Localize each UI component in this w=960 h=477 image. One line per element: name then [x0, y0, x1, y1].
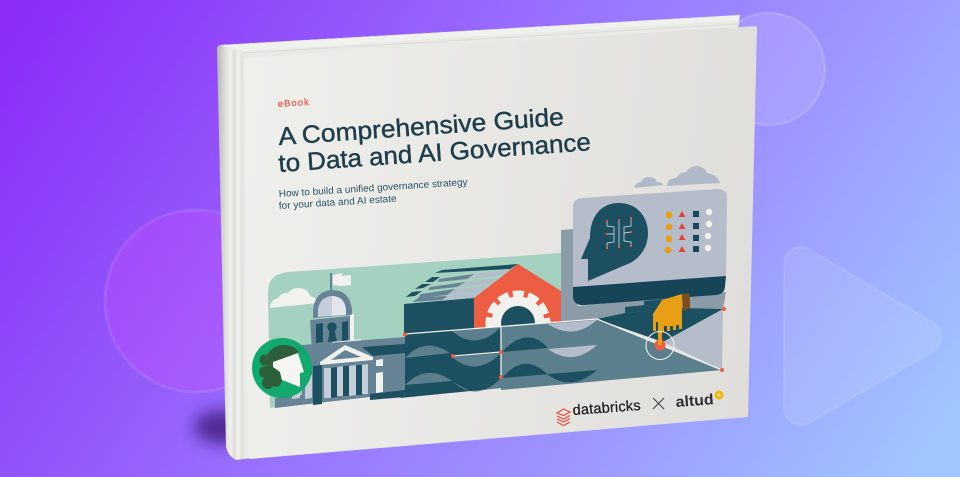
book — [217, 15, 757, 460]
subtitle: for your data and AI estate — [278, 194, 398, 212]
subtitle — [278, 177, 468, 212]
decorative play triangle — [784, 247, 941, 425]
icon: databricks stack — [557, 409, 570, 426]
decorative circle: top right — [713, 13, 825, 125]
dark warehouse box — [404, 298, 474, 336]
monitor — [573, 189, 727, 313]
flag — [330, 273, 332, 291]
main body — [275, 337, 405, 408]
icon: head with circuit — [581, 203, 648, 281]
data floor planes — [400, 308, 723, 398]
warehouse roof — [406, 264, 518, 302]
front cover — [244, 26, 757, 459]
logo mark: yellow o — [716, 392, 722, 398]
icon: pointing hand — [646, 293, 690, 360]
connector lines and nodes — [403, 307, 726, 379]
clouds: top right — [634, 166, 720, 188]
book spine — [217, 45, 252, 460]
logo text: altudo: altud — [675, 391, 714, 411]
orange gable with gear — [474, 264, 561, 352]
logos — [557, 391, 722, 426]
subtitle: How to build a unified governance strategy — [278, 177, 468, 200]
cloud: left — [270, 288, 318, 308]
capitol building — [275, 273, 405, 408]
icon: green profile badge — [252, 338, 312, 398]
dome — [313, 290, 352, 318]
dot matrix legend — [665, 209, 712, 253]
icon: gear — [489, 294, 547, 352]
monitor stand backdrop — [561, 229, 726, 322]
book shadow — [194, 410, 254, 444]
windows — [316, 321, 348, 343]
side windows — [376, 359, 383, 393]
decorative circle: left — [105, 210, 287, 392]
mint sky panel — [268, 253, 561, 408]
multiplication sign — [653, 398, 664, 409]
wave shapes — [405, 327, 501, 392]
illustration — [252, 166, 727, 408]
drum — [310, 316, 354, 352]
back cover top edge — [220, 15, 740, 62]
title: A Comprehensive Guide — [277, 103, 565, 151]
logo text: databricks: databricks — [572, 398, 641, 419]
title: to Data and AI Governance — [277, 128, 592, 178]
eyebrow: eBook: eBook — [277, 97, 309, 110]
columns — [313, 365, 322, 405]
title — [277, 103, 592, 178]
pediment — [320, 345, 373, 365]
keyhole — [327, 322, 337, 332]
